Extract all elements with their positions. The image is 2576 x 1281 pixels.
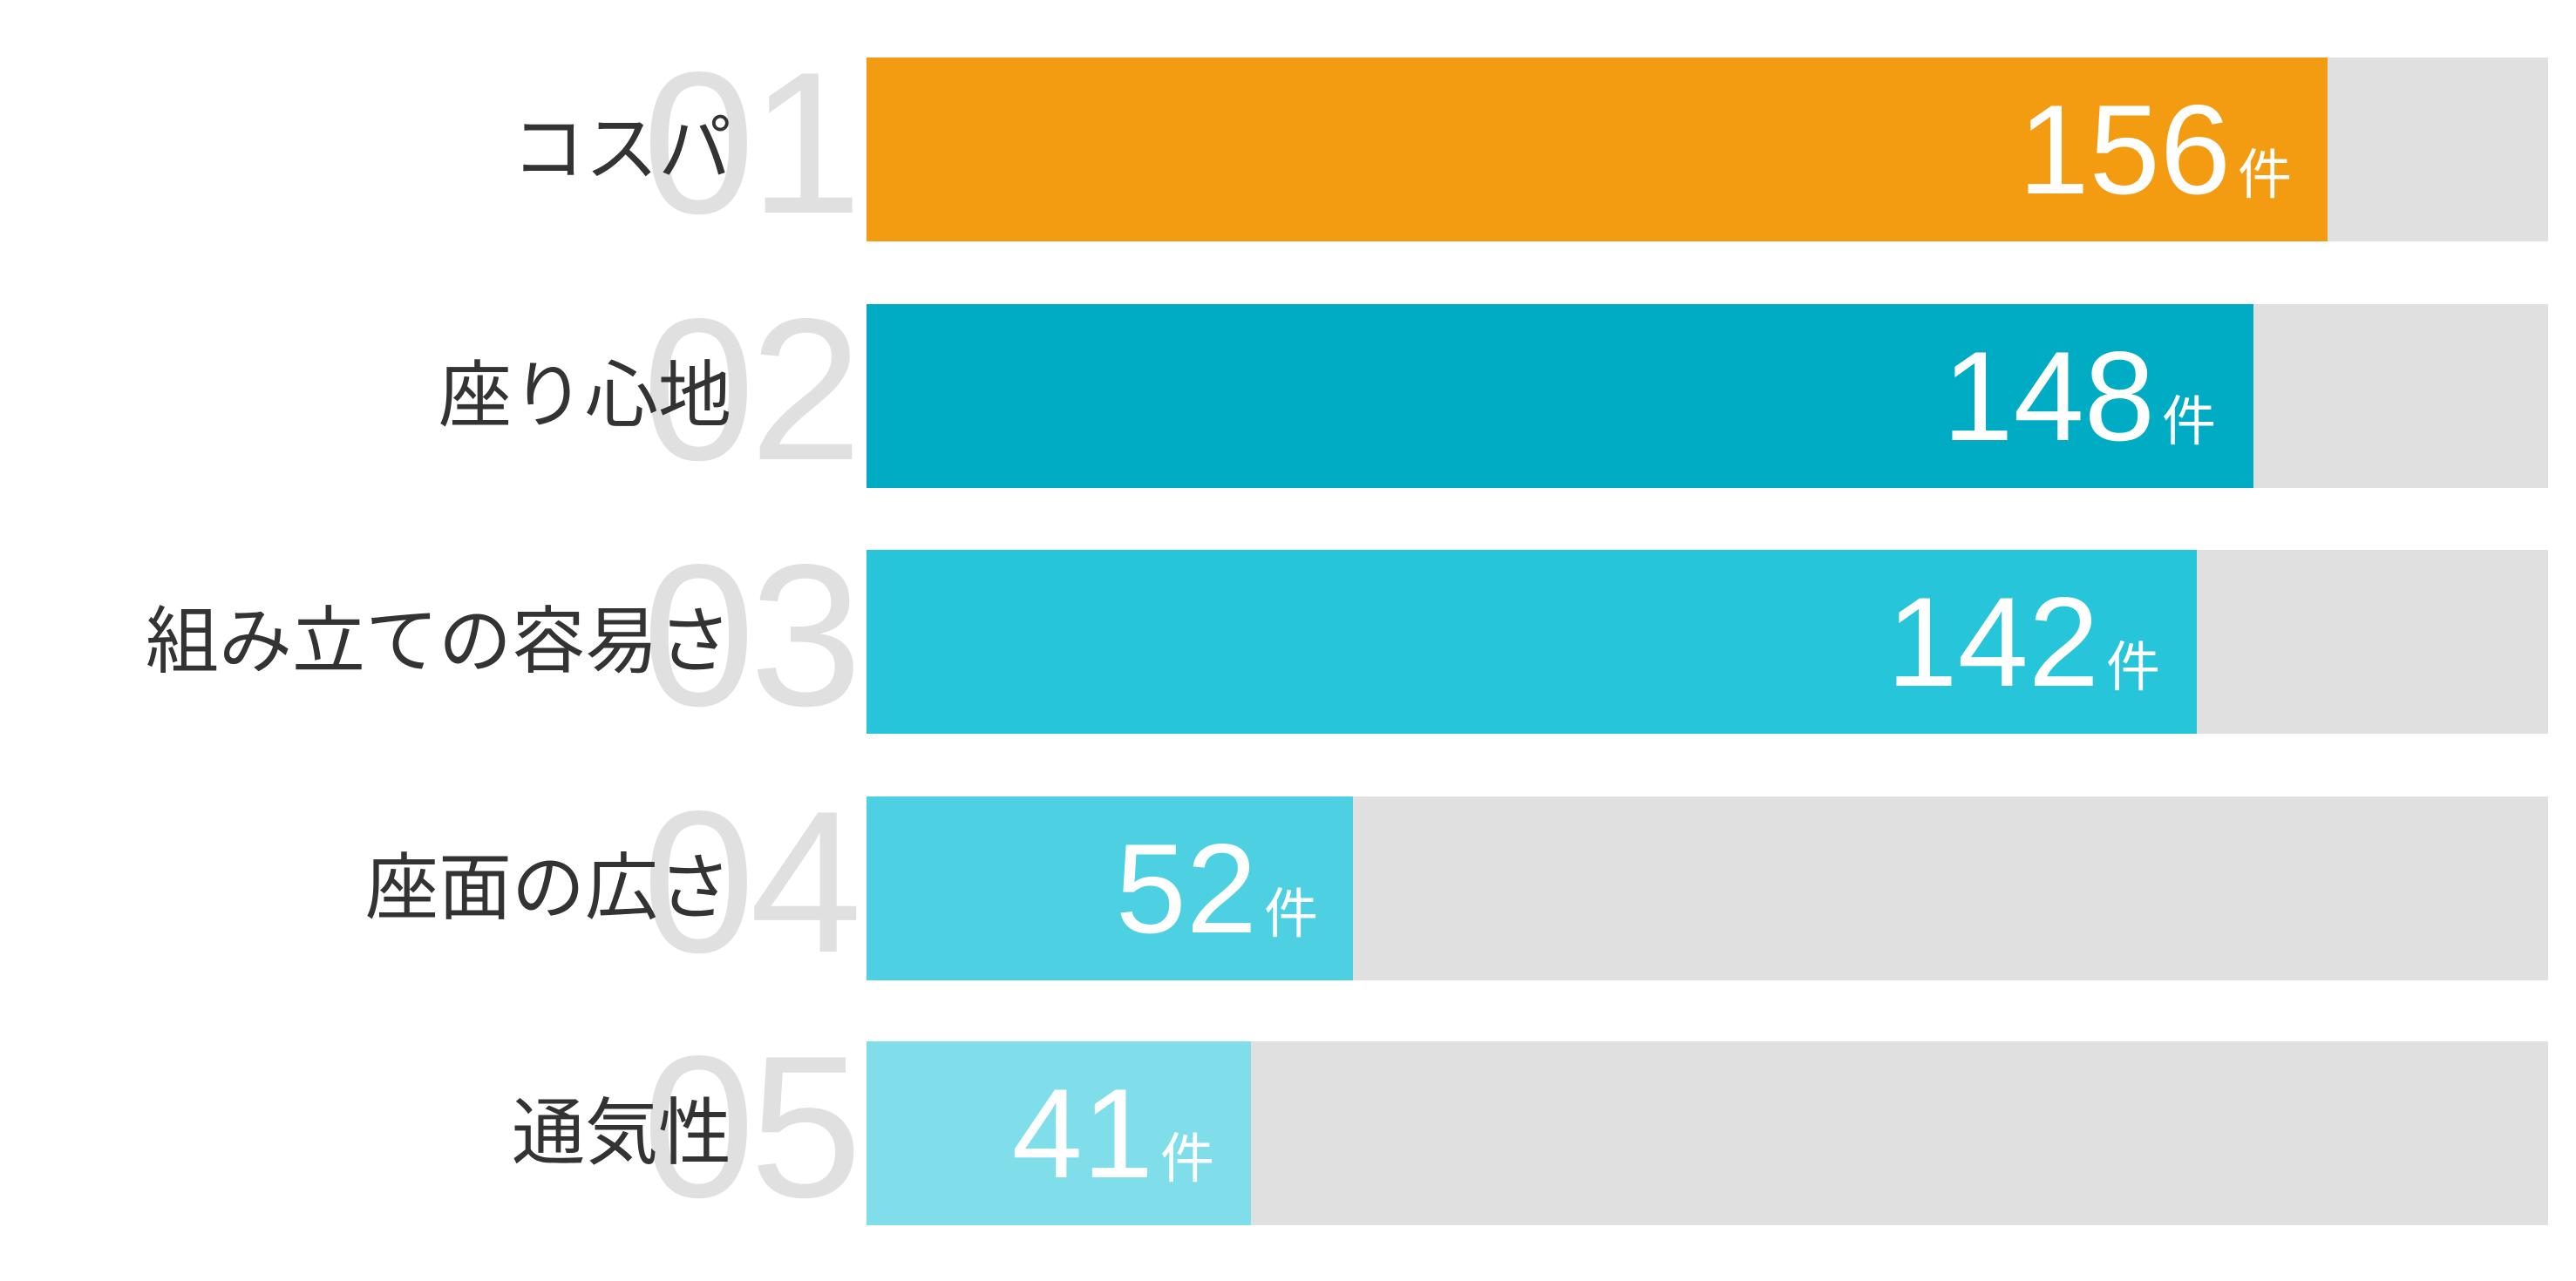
- ghost rank 02: 02: [642, 277, 857, 503]
- label: コスパ: [512, 108, 731, 190]
- bar 142: [867, 550, 2197, 734]
- ghost rank 04: 04: [642, 769, 857, 995]
- track: [867, 796, 2548, 980]
- bar 52: [867, 796, 1353, 980]
- bar 41: [867, 1041, 1251, 1225]
- row 2: 座り心地: [438, 277, 2548, 503]
- row 3: [146, 523, 2548, 749]
- track: [867, 58, 2548, 241]
- ghost rank 05: 05: [642, 1014, 857, 1240]
- label: 通気性: [512, 1092, 731, 1174]
- value: 148件: [1942, 325, 2216, 467]
- ghost rank 01: 01: [642, 30, 857, 256]
- track: [867, 550, 2548, 734]
- value: 41件: [1012, 1062, 1214, 1204]
- row 5: [512, 1014, 2548, 1240]
- ghost rank 03: 03: [642, 523, 857, 749]
- label: 組み立ての容易さ: [146, 600, 731, 682]
- bar 148: [867, 304, 2253, 488]
- row 1: コスパ: [512, 30, 2548, 256]
- track: [867, 304, 2548, 488]
- label: 座面の広さ: [365, 847, 731, 929]
- row 4: [365, 769, 2548, 995]
- track: [867, 1041, 2548, 1225]
- value: 52件: [1116, 817, 1318, 959]
- label: 座り心地: [438, 355, 731, 437]
- value: 142件: [1886, 571, 2160, 713]
- bar 156: [867, 58, 2328, 241]
- value: 156件: [2018, 78, 2292, 220]
